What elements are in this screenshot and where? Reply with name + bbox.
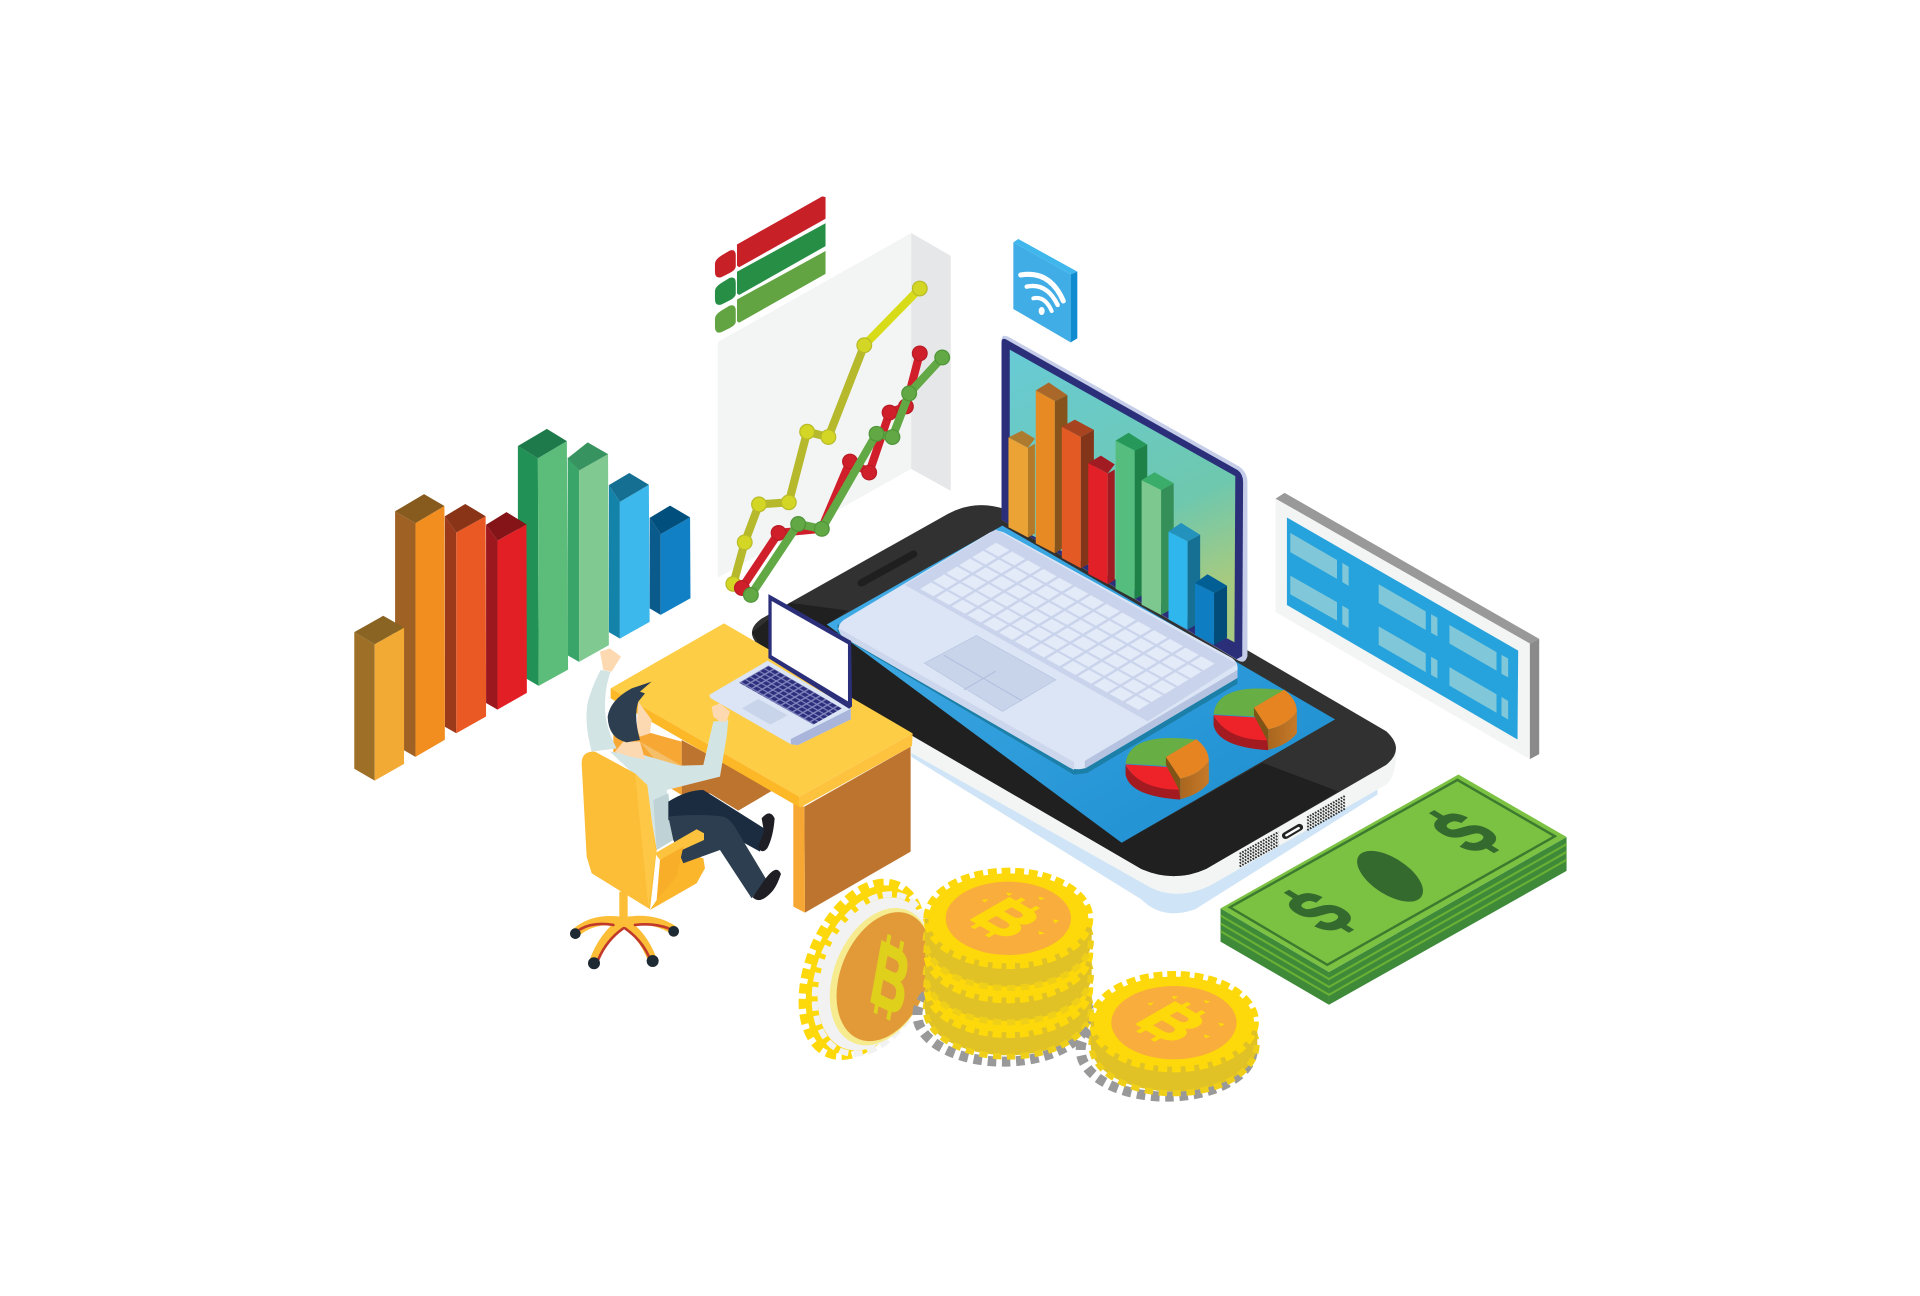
small laptop keyboard (739, 666, 842, 725)
green line (744, 350, 950, 602)
pie chart lower (1126, 738, 1209, 800)
bar 4 red (486, 512, 527, 710)
laptop base (839, 531, 1238, 769)
torso (610, 720, 728, 850)
desk (611, 623, 913, 913)
phone screen (827, 526, 1335, 843)
phone shadow (911, 731, 1378, 913)
bar 7 light blue (609, 473, 650, 639)
bar 8 blue (650, 506, 690, 615)
laptop screen frame (1002, 336, 1247, 662)
legend bars (715, 196, 826, 333)
laptop on the phone (838, 336, 1247, 775)
shoes (758, 813, 775, 851)
note centre ellipse (1350, 841, 1431, 912)
coin stack middle (925, 906, 1092, 1022)
charging port (1286, 827, 1299, 836)
bar 6 pale green (568, 442, 609, 662)
smartphone lying flat (752, 505, 1396, 913)
bitcoin symbol: B (956, 889, 1057, 948)
bitcoin symbol: B (865, 922, 916, 1036)
bitcoin coins (781, 867, 1257, 1097)
small laptop touchpad (742, 699, 788, 725)
laptop screen display (1010, 350, 1235, 642)
hair (608, 682, 652, 742)
desk right pedestal (793, 747, 911, 913)
keyboard deck (905, 530, 1237, 721)
phone body (752, 505, 1396, 876)
small laptop screen (768, 594, 852, 709)
neck (615, 742, 645, 759)
phone lower bezel (752, 603, 1339, 876)
note sides (1221, 837, 1567, 1005)
coin stack bottom (925, 941, 1092, 1057)
man celebrating in office chair (570, 648, 781, 969)
coin stack top (925, 872, 1092, 988)
yellow line (726, 281, 927, 591)
touchpad (924, 636, 1056, 711)
keyboard keys (918, 541, 1217, 711)
bar 3 orange-red (445, 504, 486, 733)
dollar sign left: S (1268, 881, 1373, 943)
desk back panel (682, 740, 773, 811)
bar chart: 3D coloured columns (354, 429, 690, 781)
desk left pedestal (613, 730, 682, 795)
banknote stack (1221, 775, 1567, 1005)
laptop shadow (838, 624, 1237, 775)
bar 5 green (518, 429, 568, 686)
coin stack shadow (917, 968, 1089, 1062)
coin upright (781, 867, 953, 1071)
earpiece (861, 554, 913, 583)
note top (1221, 775, 1567, 972)
pie chart upper (1214, 689, 1297, 750)
small laptop base (709, 661, 851, 745)
bar 2 orange (395, 494, 445, 757)
hand right (712, 703, 730, 722)
bitcoin symbol: B (1121, 994, 1223, 1052)
speaker grills (1240, 796, 1345, 866)
red line (735, 346, 927, 595)
monitor panel: blue data table (1276, 493, 1539, 759)
chair base (570, 892, 679, 969)
small laptop on desk (709, 594, 852, 745)
line chart on folded wall panel (715, 196, 951, 602)
bar 1 amber (354, 616, 404, 781)
desk top (611, 623, 913, 808)
face (637, 702, 652, 737)
screen bar chart (1008, 382, 1227, 645)
dollar sign right: S (1414, 801, 1518, 864)
coin right (1091, 975, 1257, 1093)
legs (668, 790, 767, 852)
chair seat (650, 853, 705, 910)
chair back (582, 752, 657, 909)
left arm raised (586, 670, 617, 752)
icon: wifi tile (1013, 239, 1077, 342)
chair armrest (655, 829, 704, 860)
pie charts on phone screen (1126, 689, 1297, 800)
wall panel (718, 233, 951, 578)
hand left (600, 648, 621, 672)
phone base (911, 731, 1396, 894)
coin right shadow (1081, 1003, 1253, 1097)
